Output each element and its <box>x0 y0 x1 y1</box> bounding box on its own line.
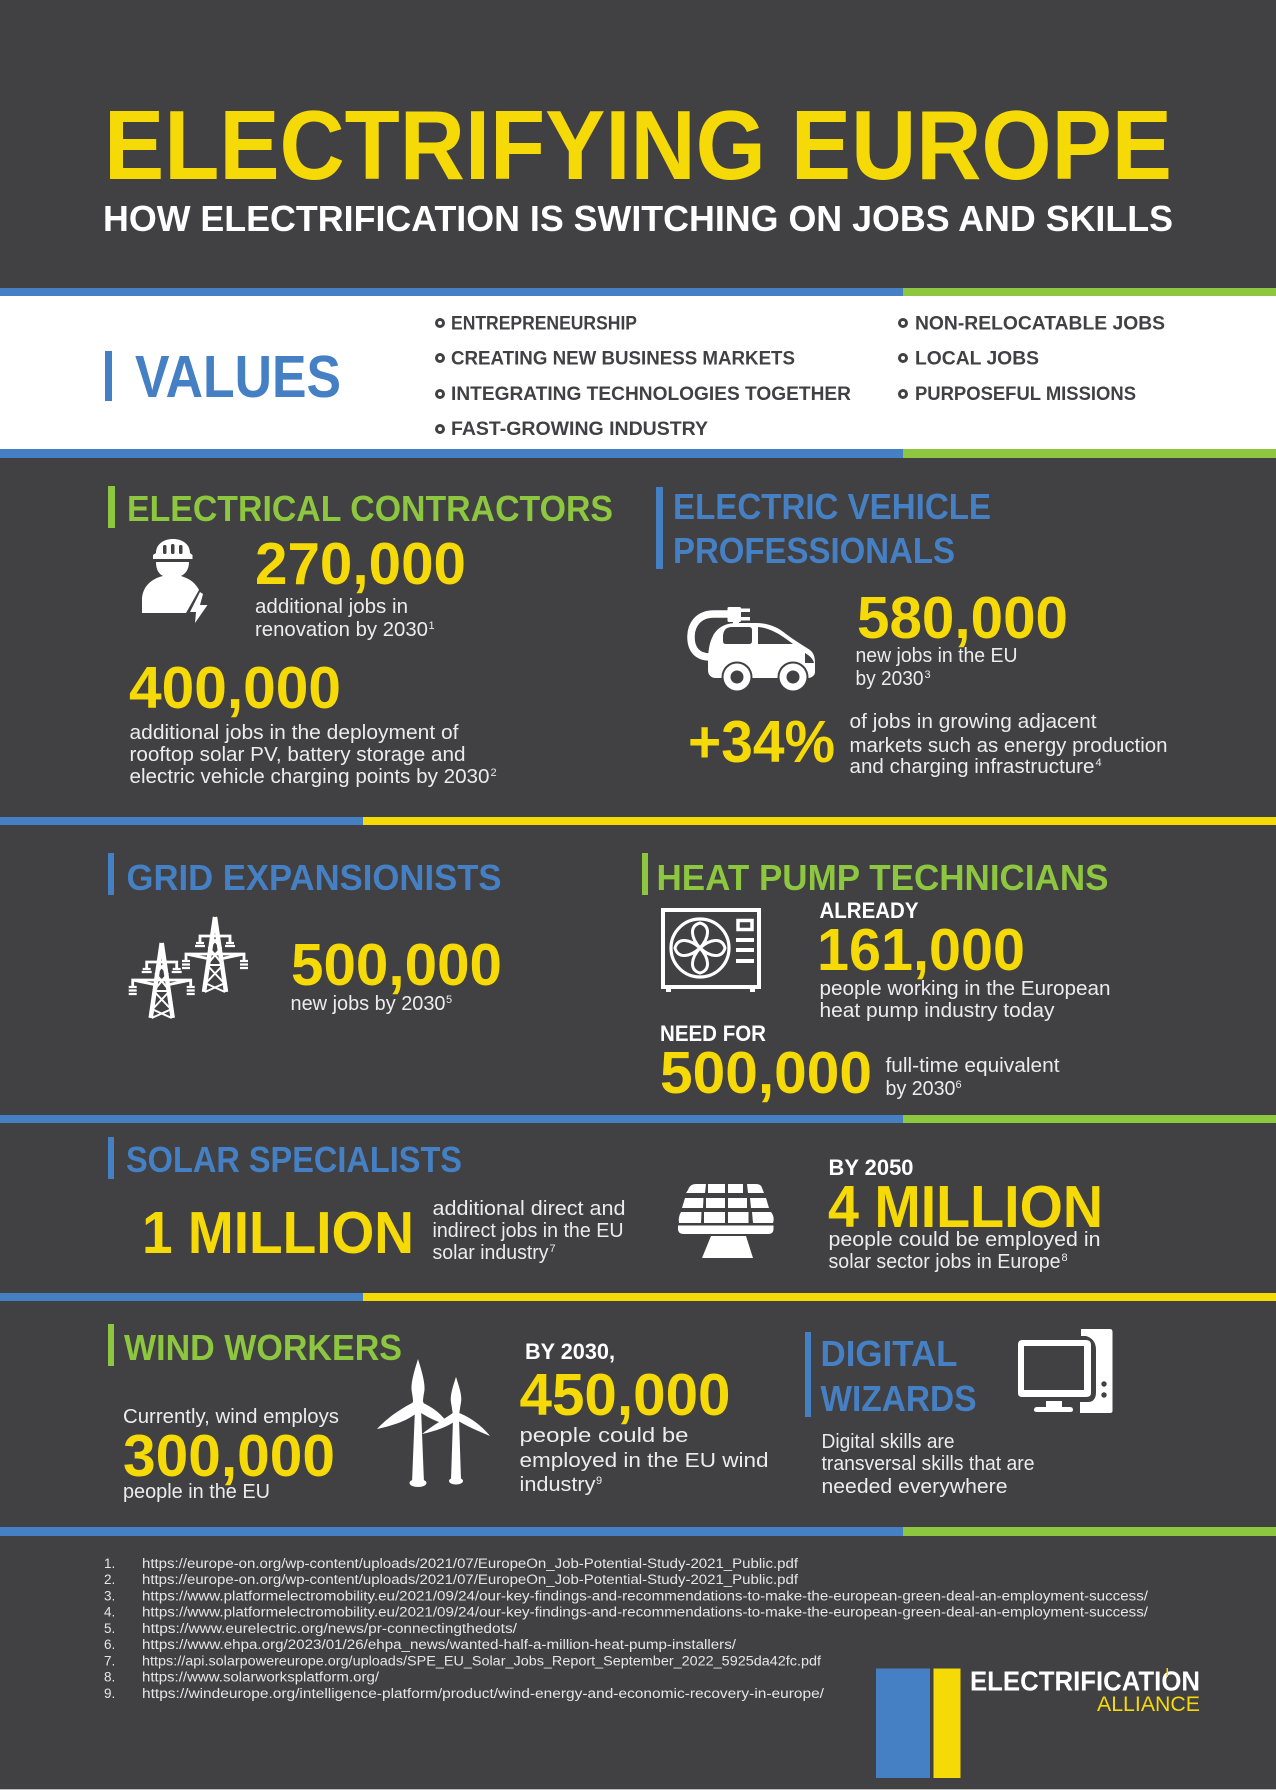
heading: digital wizards: WIZARDS <box>820 1378 976 1419</box>
references list: 6. <box>104 1637 115 1652</box>
title: ELECTRIFYING EUROPE <box>104 90 1172 200</box>
stat: 300,000: people in the EU <box>123 1481 270 1503</box>
heading: digital wizards: DIGITAL <box>820 1333 958 1374</box>
heading: digital wizards <box>805 1332 976 1419</box>
references list: 1. <box>104 1556 115 1571</box>
panel: digital wizards <box>805 1329 1112 1498</box>
icon: electricity pylons <box>129 917 248 1018</box>
stat: need for 500,000: 500,000 <box>660 1040 872 1106</box>
panel: wind workers <box>108 1324 768 1503</box>
references list: 7. <box>104 1654 115 1668</box>
text: digital skills <box>822 1431 1034 1498</box>
stat: 580,000: 580,000 <box>857 585 1068 651</box>
values list: right column: LOCAL JOBS <box>915 348 1039 370</box>
references list: 8. <box>104 1670 115 1684</box>
stat: 300,000 <box>123 1406 339 1503</box>
heading: electrical contractors: ELECTRICAL CONTRACTORS <box>127 488 613 529</box>
text: digital skills: needed everywhere <box>822 1476 1008 1498</box>
heading: wind workers: WIND WORKERS <box>124 1327 402 1368</box>
stat: 580,000: new jobs in the EU <box>856 645 1018 667</box>
stat: by 2030 450,000: employed in the EU wind <box>520 1450 768 1472</box>
references list: https://europe-on.org/wp-content/uploads/2021/07/EuropeOn_Job-Potential-Study-2021_Public.pdf <box>142 1556 798 1571</box>
references list: https://europe-on.org/wp-content/uploads/2021/07/EuropeOn_Job-Potential-Study-2021_Public.pdf <box>142 1572 798 1587</box>
stat: need for 500,000: full-time equivalent <box>886 1055 1060 1077</box>
subtitle: HOW ELECTRIFICATION IS SWITCHING ON JOBS AND SKILLS <box>103 198 1173 239</box>
heading: solar specialists: SOLAR SPECIALISTS <box>126 1139 462 1180</box>
text: digital skills: transversal skills that are <box>822 1453 1034 1475</box>
stat: 580,000: by 2030 <box>856 668 924 690</box>
values list: left column: ENTREPRENEURSHIP <box>451 312 637 334</box>
stat: by 2030 450,000: BY 2030, <box>525 1339 615 1364</box>
stat: need for 500,000: NEED FOR <box>660 1021 766 1046</box>
stat: by 2030 450,000: industry <box>520 1474 596 1496</box>
stat: by 2050 4 million <box>828 1155 1103 1273</box>
stat: +34%: markets such as energy production <box>850 735 1168 757</box>
stat: 400,000: additional jobs in the deployment of <box>130 722 459 744</box>
references list: https://www.platformelectromobility.eu/2021/09/24/our-key-findings-and-recommendations-to-make-the-european-green-deal-an-employment-success/ <box>142 1588 1148 1604</box>
references list: https://www.solarworksplatform.org/ <box>142 1670 379 1684</box>
stat: by 2030 450,000: 9 <box>596 1475 602 1487</box>
stat: need for 500,000 <box>660 1021 1060 1106</box>
stat: by 2050 4 million: people could be employed in <box>828 1229 1100 1251</box>
stat: 1 million <box>142 1198 626 1266</box>
stat: by 2050 4 million: solar sector jobs in Europe <box>828 1251 1060 1273</box>
panel: values <box>0 296 1276 449</box>
panel: electrical contractors <box>108 486 613 788</box>
references list: 4. <box>104 1605 115 1620</box>
stat: 270,000: 1 <box>428 620 435 632</box>
icon: heat pump unit <box>663 910 759 992</box>
stat: already 161,000: ALREADY <box>820 898 919 923</box>
stat: 400,000: 400,000 <box>129 655 341 721</box>
stat: +34%: and charging infrastructure <box>850 756 1094 778</box>
values list: left column: INTEGRATING TECHNOLOGIES TOGETHER <box>451 383 851 405</box>
stat: 400,000 <box>129 655 497 788</box>
stat: by 2030 450,000: people could be <box>520 1425 688 1447</box>
heading: electric vehicle professionals: ELECTRIC VEHICLE <box>673 486 991 527</box>
panel: grid expansionists <box>108 853 502 1018</box>
values list: right column <box>900 312 1165 405</box>
icon: wind turbines <box>377 1359 490 1487</box>
references list: https://www.eurelectric.org/news/pr-connectingthedots/ <box>142 1621 517 1636</box>
references list: https://www.ehpa.org/2023/01/26/ehpa_news/wanted-half-a-million-heat-pump-installers/ <box>142 1637 736 1652</box>
references list: https://www.platformelectromobility.eu/2021/09/24/our-key-findings-and-recommendations-to-make-the-european-green-deal-an-employment-success/ <box>142 1605 1148 1620</box>
logo: electrification alliance: ALLIANCE <box>1097 1693 1200 1716</box>
references list: 5. <box>104 1621 115 1636</box>
values list: right column: PURPOSEFUL MISSIONS <box>915 383 1136 405</box>
stat: 300,000: Currently, wind employs <box>123 1406 339 1428</box>
panel: heat pump technicians <box>642 853 1110 1106</box>
heading: electric vehicle professionals <box>656 486 991 571</box>
panel: electric vehicle professionals <box>656 486 1168 778</box>
references list: 9. <box>104 1686 115 1701</box>
references list: 3. <box>104 1588 115 1604</box>
references list: https://api.solarpowereurope.org/uploads/SPE_EU_Solar_Jobs_Report_September_2022_5925da42fc.pdf <box>142 1654 821 1668</box>
stat: +34%: +34% <box>688 709 835 775</box>
stat: by 2050 4 million: 4 MILLION <box>828 1174 1103 1240</box>
stat: 400,000: electric vehicle charging points by 2030 <box>130 766 490 788</box>
values list: left column: CREATING NEW BUSINESS MARKETS <box>451 348 795 370</box>
stat: 270,000: renovation by 2030 <box>255 619 428 641</box>
stat: by 2030 450,000: 450,000 <box>520 1362 730 1428</box>
stat: 270,000: additional jobs in <box>255 596 408 618</box>
stat: 270,000: 270,000 <box>255 531 466 597</box>
heading: values: VALUES <box>135 344 341 410</box>
references list <box>104 1556 1148 1701</box>
values list: left column: FAST-GROWING INDUSTRY <box>451 418 708 440</box>
text: digital skills: Digital skills are <box>822 1431 954 1453</box>
stat: +34%: of jobs in growing adjacent <box>850 711 1097 733</box>
stat: 400,000: rooftop solar PV, battery storage and <box>130 744 466 766</box>
heading: grid expansionists: GRID EXPANSIONISTS <box>126 857 502 898</box>
stat: 1 million: solar industry <box>432 1242 548 1264</box>
stat: already 161,000: people working in the European <box>820 978 1110 1000</box>
stat: 1 million: 1 MILLION <box>142 1200 414 1266</box>
stat: 400,000: 2 <box>490 767 497 779</box>
icon: desktop computer <box>1018 1329 1112 1413</box>
stat: already 161,000 <box>817 898 1110 1022</box>
values list: right column: NON-RELOCATABLE JOBS <box>915 312 1165 334</box>
icon: solar panel <box>678 1184 774 1258</box>
stat: 580,000 <box>856 585 1068 690</box>
logo: electrification alliance: ELECTRIFICATION <box>970 1666 1200 1696</box>
stat: 500,000 new jobs: 500,000 <box>291 932 502 998</box>
stat: already 161,000: 161,000 <box>817 917 1025 983</box>
stat: by 2050 4 million: 8 <box>1062 1252 1068 1264</box>
stat: 300,000: 300,000 <box>123 1423 335 1489</box>
stat: 500,000 new jobs: 5 <box>446 994 452 1006</box>
stat: 1 million: additional direct and <box>432 1198 626 1220</box>
stat: 270,000 <box>255 531 466 641</box>
stat: need for 500,000: by 2030 <box>886 1078 956 1100</box>
stat: 580,000: 3 <box>924 669 931 681</box>
stat: 500,000 new jobs: new jobs by 2030 <box>290 993 446 1015</box>
references list: https://windeurope.org/intelligence-platform/product/wind-energy-and-economic-recovery-in-europe/ <box>142 1686 824 1701</box>
stat: +34%: 4 <box>1096 757 1102 769</box>
stat: by 2050 4 million: BY 2050 <box>828 1155 914 1180</box>
stat: 1 million: 7 <box>550 1243 556 1255</box>
icon: electric car with plug <box>691 607 815 692</box>
logo: electrification alliance <box>876 1666 1200 1778</box>
stat: +34% <box>688 709 1168 778</box>
heading: electric vehicle professionals: PROFESSIONALS <box>673 530 955 571</box>
heading: heat pump technicians: HEAT PUMP TECHNICIANS <box>656 857 1108 898</box>
values list: left column <box>436 312 851 440</box>
stat: need for 500,000: 6 <box>956 1079 962 1091</box>
stat: by 2030 450,000 <box>520 1339 768 1496</box>
references list: 2. <box>104 1572 115 1587</box>
icon: electrician with helmet <box>142 539 208 623</box>
stat: 1 million: indirect jobs in the EU <box>432 1220 624 1242</box>
stat: already 161,000: heat pump industry today <box>820 1000 1054 1022</box>
panel: solar specialists <box>108 1137 1103 1273</box>
